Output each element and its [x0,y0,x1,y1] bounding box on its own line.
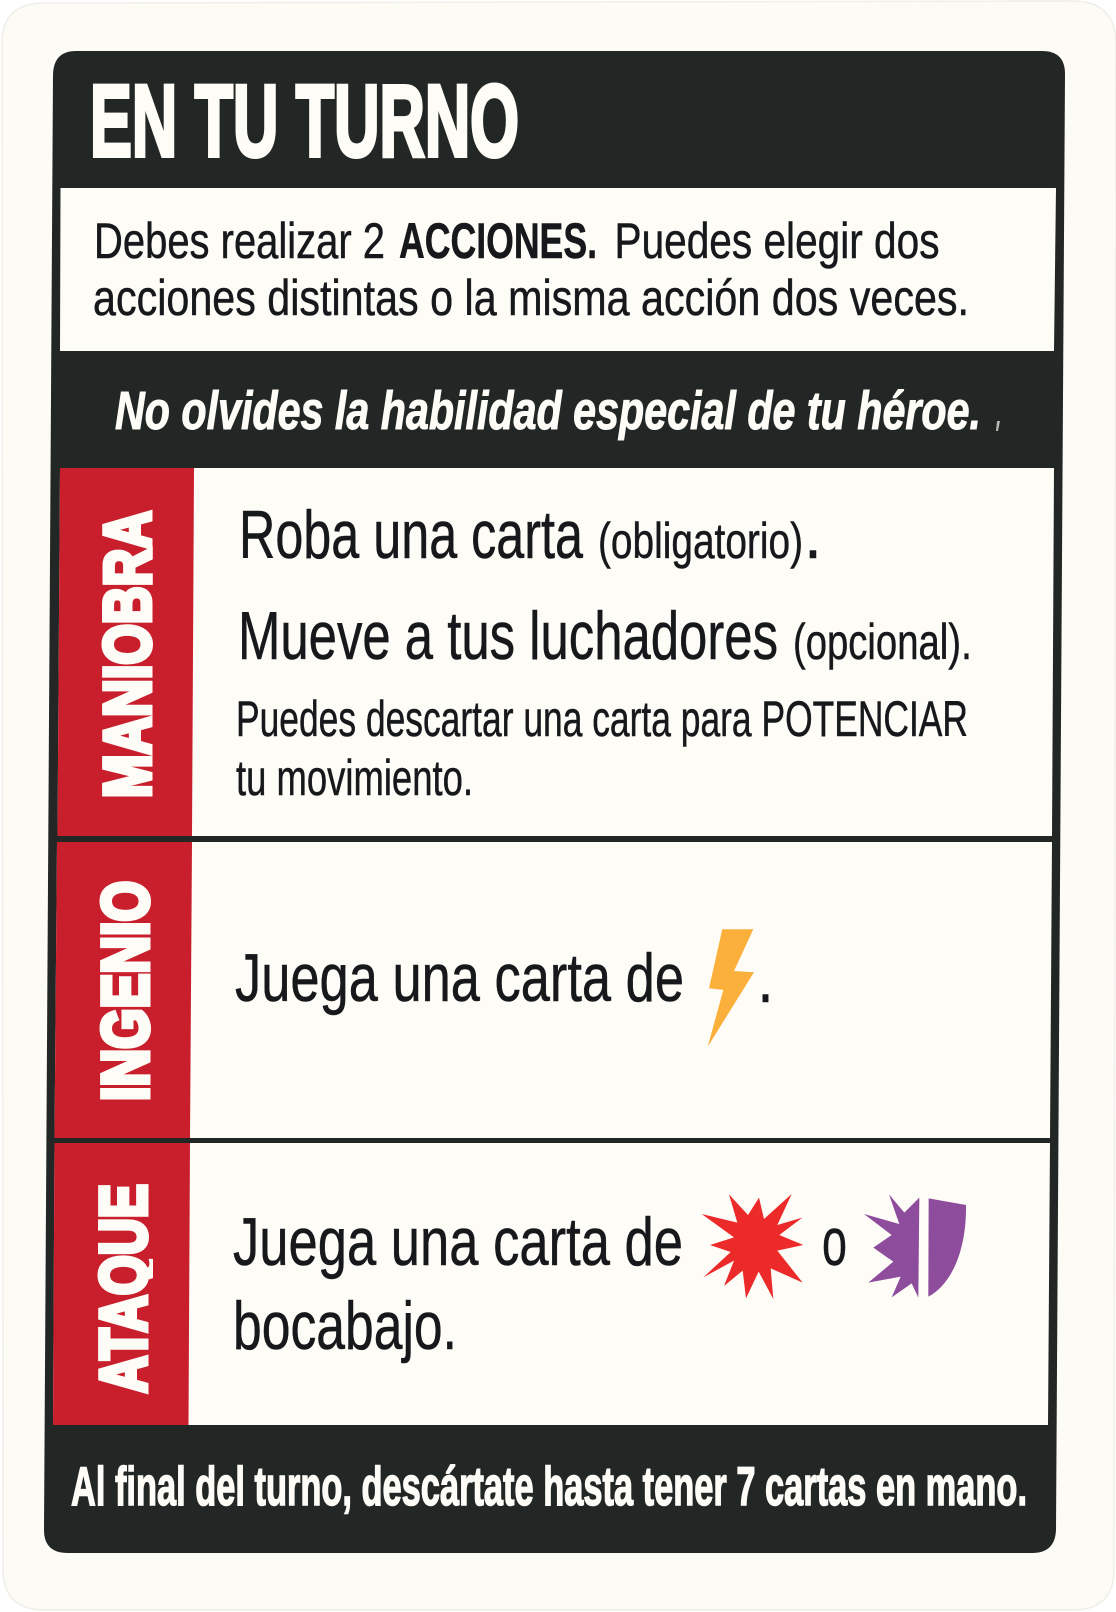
play a card text: Juega una carta de [233,1204,683,1280]
red tab: ataque [53,1143,190,1425]
draw a card line: (obligatorio) [598,513,803,569]
move fighters line: . [961,614,972,670]
red tab: ingenio [54,842,192,1138]
panel: ingenio [54,842,1052,1138]
panel: maniobra [58,468,1054,836]
intro text line 1: Debes realizar 2 [94,213,385,269]
title: EN TU TURNO [90,64,519,178]
panel: intro [60,188,1056,351]
red tab: maniobra [58,468,194,836]
move fighters line: Mueve a tus luchadores [238,598,778,674]
icon: purple burst and shield [864,1194,966,1298]
intro text line 1 [94,213,940,269]
label: ataque: ATAQUE [86,1184,160,1393]
play a card text: Juega una carta de [235,940,684,1016]
boost note: tu movimiento. [236,750,473,806]
panel: ataque [53,1143,1050,1425]
move fighters line: (opcional) [793,614,961,670]
draw a card line: . [807,513,819,569]
icon: red burst [702,1194,803,1299]
intro text line 1: ACCIONES. [399,213,597,269]
boost note [236,691,968,806]
draw a card line: Roba una carta [239,497,583,573]
label: maniobra: MANIOBRA [90,511,164,798]
mark [996,421,1000,431]
period: . [760,957,771,1013]
label: ingenio: INGENIO [88,881,162,1101]
intro text line 1: Puedes elegir dos [614,213,940,269]
icon: lightning bolt [708,929,754,1047]
second line: bocabajo. [233,1288,457,1364]
word: o: o [822,1204,847,1280]
